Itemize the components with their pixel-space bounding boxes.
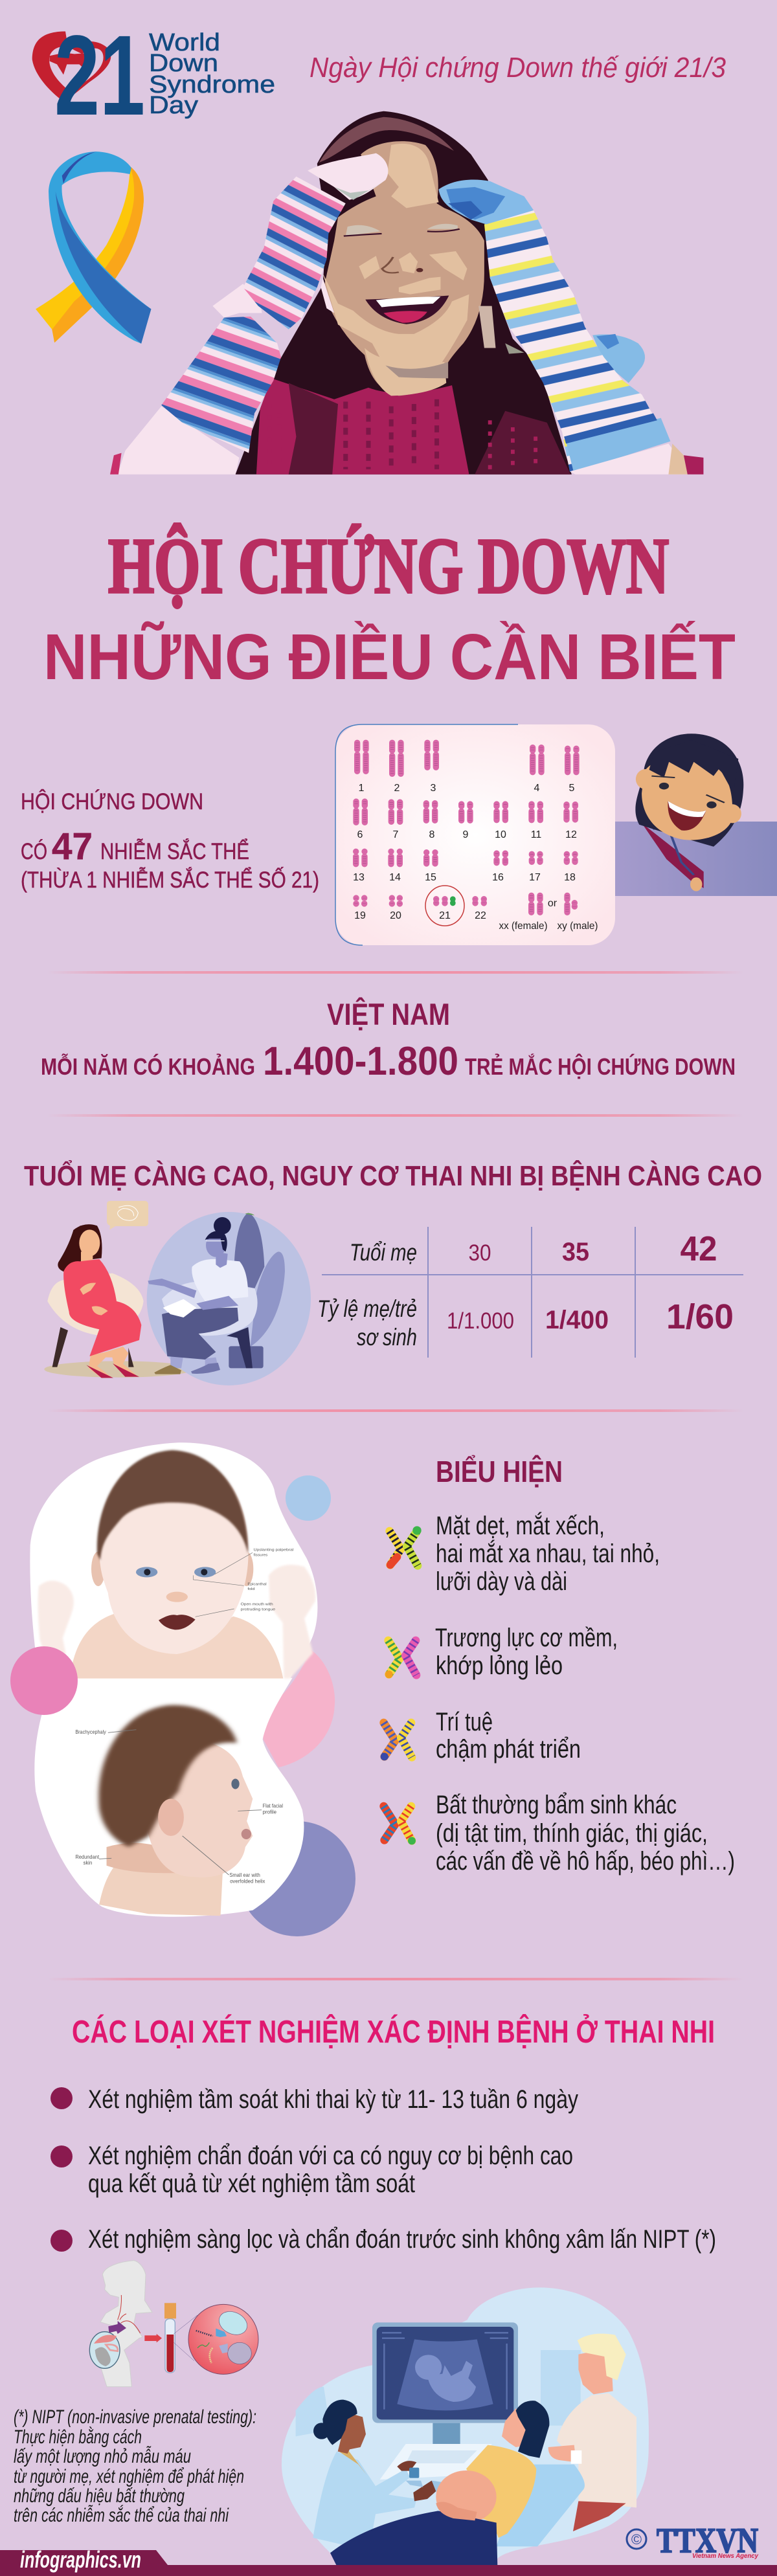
test item 2: qua kết quả từ xét nghiệm tầm soát	[88, 2169, 415, 2198]
heading: Việt Nam: VIỆT NAM	[327, 997, 450, 1031]
logo: TTXVN	[627, 2521, 758, 2560]
ears	[91, 1552, 105, 1586]
symptom text 2: Trương lực cơ mềm,	[435, 1624, 618, 1652]
chromosome numbers	[353, 783, 598, 932]
baby profile annotations: overfolded helix	[230, 1879, 265, 1885]
console	[380, 2444, 492, 2480]
baby profile annotations: skin	[84, 1860, 92, 1866]
baby profile annotations	[75, 1729, 283, 1885]
chromosome numbers: or	[548, 898, 557, 909]
hair back	[236, 111, 572, 475]
baby profile annotations: profile	[263, 1809, 276, 1815]
logo: TTXVN: Vietnam News Agency	[692, 2553, 758, 2560]
magnified sample circle	[174, 2304, 258, 2374]
left hand sock	[308, 153, 388, 200]
divider	[47, 971, 743, 974]
footnote: NIPT definition	[14, 2406, 256, 2526]
text block: 47 chromosomes: CÓ	[21, 839, 47, 864]
baby front annotations	[193, 1549, 293, 1617]
right fist and arm	[269, 1565, 315, 1679]
patient	[330, 2401, 549, 2566]
panel: karyotype	[335, 724, 615, 945]
icon: sock chromosome 1	[390, 1526, 422, 1565]
illustration: laughing girl with striped socks	[110, 111, 703, 475]
illustration: pregnant woman and doctor	[44, 1201, 311, 1385]
plant	[227, 1213, 285, 1368]
chromosomes	[356, 743, 576, 912]
symptom text 1: hai mắt xa nhau, tai nhỏ,	[436, 1539, 660, 1568]
chromosome numbers: 12	[565, 829, 577, 840]
woman	[47, 1224, 144, 1378]
symptom text 4: Bất thường bẩm sinh khác	[436, 1791, 677, 1819]
chromosome numbers: 2	[394, 783, 400, 794]
symptom text 1: Mặt dẹt, mắt xếch,	[436, 1511, 605, 1540]
symptom text 4: (dị tật tim, thính giác, thị giác,	[436, 1819, 708, 1848]
light blue blob	[282, 2287, 649, 2559]
logo wordmark	[149, 29, 275, 119]
text block: 47 chromosomes: HỘI CHỨNG DOWN	[21, 789, 203, 814]
title line 2: NHỮNG ĐIỀU CẦN BIẾT	[43, 621, 736, 693]
divider	[47, 1114, 743, 1117]
logo wordmark: Day	[149, 92, 198, 119]
panel: upper white blob with baby front	[30, 1442, 317, 1679]
symptom text 3: Trí tuệ	[436, 1708, 493, 1736]
chromosome numbers: 3	[431, 783, 436, 794]
footnote: NIPT definition: trên các nhiễm sắc thể của thai nhi	[14, 2505, 229, 2526]
baby front annotations: fold	[247, 1587, 254, 1591]
footnote: NIPT definition: những dấu hiệu bất thường	[14, 2485, 185, 2507]
baby profile	[98, 1705, 253, 1916]
rug	[44, 1361, 193, 1378]
chromosome numbers: 1	[359, 783, 365, 794]
chromosome numbers: xx (female)	[499, 921, 548, 932]
symptom text 2: khớp lỏng lẻo	[436, 1652, 563, 1680]
statistic: yearly cases: 1.400-1.800	[263, 1039, 458, 1084]
logo: World Down Syndrome Day	[32, 12, 275, 139]
test item 1: Xét nghiệm tầm soát khi thai kỳ từ 11- 13 tuần 6 ngày	[88, 2085, 578, 2114]
table: maternal age vs. ratio: 35	[562, 1238, 589, 1266]
exam bed	[497, 2465, 585, 2546]
decorative circle: purple	[239, 1821, 355, 1936]
statistic: yearly cases	[41, 1039, 736, 1084]
eyes	[136, 1567, 216, 1577]
chromosome numbers: 6	[357, 829, 363, 840]
icon: awareness ribbon	[36, 151, 151, 344]
chromosome numbers: 22	[475, 910, 486, 921]
hair highlights	[319, 117, 454, 162]
chromosome numbers: 15	[425, 872, 436, 883]
face	[321, 141, 524, 396]
table: maternal age vs. ratio: Tuổi mẹ	[350, 1239, 417, 1266]
logo wordmark: World	[149, 29, 220, 56]
chromosome numbers: xy (male)	[557, 921, 598, 932]
chromosome numbers: 16	[492, 872, 504, 883]
left arm sleeve and cuff	[110, 177, 346, 475]
test item 2	[51, 2142, 573, 2198]
arrows and vessels	[108, 2295, 162, 2342]
shoulders	[70, 1613, 283, 1679]
right arm sock	[438, 180, 703, 475]
chromosome numbers: 18	[564, 872, 576, 883]
blood test tube	[164, 2303, 176, 2373]
baby profile annotations: Flat facial	[263, 1803, 283, 1809]
mouth	[365, 295, 449, 324]
chromosome numbers: 13	[353, 872, 365, 883]
man	[548, 2334, 636, 2531]
face	[99, 1455, 249, 1654]
icon: sock chromosome 4	[384, 1806, 416, 1844]
tagline: Ngày Hội chứng Down thế giới 21/3	[310, 52, 726, 84]
table: maternal age vs. ratio: sơ sinh	[357, 1324, 417, 1350]
panel: lower white blob with baby profile	[34, 1678, 304, 1917]
footnote: NIPT definition: (*) NIPT (non-invasive prenatal testing):	[14, 2406, 256, 2428]
chromosome numbers: 14	[389, 872, 401, 883]
chromosome numbers: 20	[390, 910, 401, 921]
logo: TTXVN: ©	[631, 2531, 642, 2548]
table: maternal age vs. ratio: Tỷ lệ mẹ/trẻ	[317, 1295, 417, 1322]
chromosome numbers: 21	[439, 910, 451, 921]
icon: red heart with world map	[32, 31, 111, 100]
baby front annotations: Upslanting palpebral	[254, 1549, 293, 1552]
footer bar with source	[0, 2546, 777, 2576]
icon: sock chromosome 2	[385, 1641, 416, 1678]
symptom text 3	[436, 1708, 581, 1764]
illustration: NIPT blood test diagram	[89, 2261, 258, 2387]
text block: 47 chromosomes: NHIỄM SẮC THỂ	[100, 838, 249, 864]
baby front annotations: Epicanthal	[247, 1582, 267, 1586]
baby profile annotations: Brachycephaly	[75, 1729, 106, 1736]
blue circle backdrop	[147, 1212, 311, 1385]
footer bar with source: infographics.vn	[20, 2546, 141, 2573]
table: maternal age vs. ratio: 1/1.000	[447, 1308, 514, 1334]
nose	[166, 1592, 188, 1602]
text block: 47 chromosomes: 47	[52, 825, 93, 868]
logo number 21: 21	[54, 12, 145, 139]
silhouette of mother	[89, 2261, 152, 2387]
symptom text 1	[436, 1511, 660, 1596]
decorative circle: blue	[286, 1475, 331, 1521]
illustration: smiling child peeking	[635, 734, 743, 891]
baby profile annotations: Redundant	[75, 1854, 99, 1860]
footnote: NIPT definition: lấy một lượng nhỏ mẫu máu	[14, 2446, 191, 2467]
table: maternal age vs. ratio: 42	[680, 1229, 717, 1268]
footnote: NIPT definition: từ người mẹ, xét nghiệm để phát hiện	[14, 2466, 244, 2487]
divider	[47, 1409, 743, 1412]
table: maternal age vs. ratio: 1/400	[545, 1306, 609, 1334]
chromosome numbers: 7	[393, 829, 399, 840]
speech bubble	[107, 1201, 148, 1229]
chromosome numbers: 5	[569, 783, 575, 794]
monitor	[372, 2322, 518, 2444]
mouth	[159, 1615, 196, 1630]
symptom text 3: chậm phát triển	[436, 1735, 581, 1764]
chromosome numbers: 11	[531, 829, 541, 840]
logo wordmark: Down	[149, 50, 218, 77]
test item 2: Xét nghiệm chẩn đoán với ca có nguy cơ bị bệnh cao	[88, 2142, 573, 2170]
symptom text 2	[435, 1624, 618, 1680]
table: maternal age vs. ratio	[317, 1227, 743, 1358]
symptom text 1: lưỡi dày và dài	[436, 1567, 567, 1596]
hair	[97, 1450, 248, 1560]
table: maternal age vs. ratio: 30	[469, 1240, 491, 1266]
sweater	[256, 378, 570, 475]
illustration: ultrasound scene	[282, 2287, 649, 2566]
left fist	[38, 1581, 74, 1664]
text block: 47 chromosomes: (THỪA 1 NHIỄM SẮC THỂ SỐ 21)	[21, 867, 319, 893]
baby front annotations: Open mouth with	[241, 1602, 273, 1606]
footnote: NIPT definition: Thực hiện bằng cách	[14, 2426, 142, 2448]
symptom text 4	[436, 1791, 735, 1876]
baby profile annotations: Small ear with	[229, 1872, 260, 1879]
baby front annotations: fissures	[254, 1553, 268, 1557]
highlight circle around chromosome 21	[425, 886, 464, 926]
doctor	[148, 1217, 258, 1374]
table: maternal age vs. ratio: 1/60	[666, 1297, 734, 1336]
doctor	[313, 2400, 447, 2551]
purple band behind kid	[615, 822, 777, 896]
chromosome numbers: 4	[534, 783, 540, 794]
womb with fetus	[89, 2332, 120, 2368]
decorative circle: pink	[10, 1646, 78, 1715]
chromosome numbers: 9	[463, 829, 469, 840]
divider	[47, 1978, 743, 1980]
text block: 47 chromosomes	[21, 789, 319, 893]
chromosome numbers: 19	[354, 910, 366, 921]
chromosome numbers: 8	[429, 829, 435, 840]
statistic: yearly cases: MỖI NĂM CÓ KHOẢNG	[41, 1053, 255, 1080]
chromosome numbers: 17	[529, 872, 541, 883]
baby front annotations: protruding tongue	[241, 1608, 275, 1612]
logo: TTXVN: TTXVN	[657, 2521, 758, 2560]
icon: sock chromosome 3	[381, 1723, 412, 1760]
logo wordmark: Syndrome	[149, 71, 275, 98]
chromosome numbers: 10	[495, 829, 506, 840]
heading: symptoms: BIỂU HIỆN	[436, 1455, 563, 1488]
decorative blob: light pink	[263, 1650, 335, 1767]
